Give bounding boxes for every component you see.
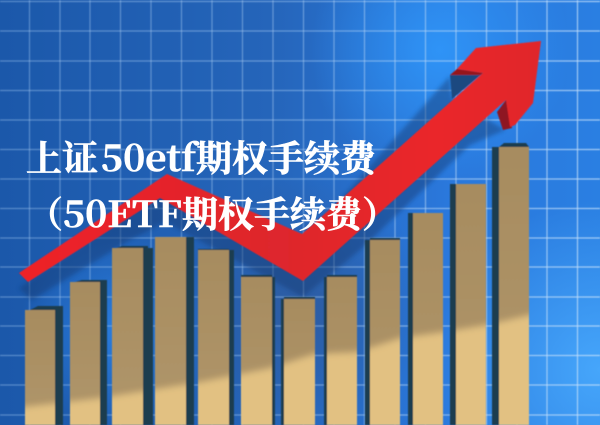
bar 8 [327,277,357,425]
title line 1: 期权手续费 [196,131,378,182]
bar chart [25,143,529,425]
bar 2 [70,282,100,425]
red rising arrow [19,41,541,282]
bar 7 [284,299,315,425]
icon: arrow notch shadow [450,73,483,99]
bar 3 [112,248,143,425]
title line 1: 50etf [101,131,200,182]
bar 11 [456,184,486,425]
arrow body [19,41,541,282]
bar 5 [198,250,229,425]
title [26,131,398,238]
title line 2: （ [27,187,63,238]
title line 2: 50ETF [63,187,182,238]
arrow cast shadow [19,76,505,300]
bar 6 [241,277,272,425]
bar 9 [370,240,400,425]
bar 12 [499,147,529,425]
bar 1 [25,310,55,425]
title line 2: 期权手续费 [182,187,364,238]
title line 1: 上证 [26,131,98,182]
bar shadows [30,143,529,425]
arrow fold [497,100,512,130]
bar 10 [413,213,443,425]
bar 4 [155,237,186,425]
lit lower section of bars [25,300,529,425]
title line 2: ） [362,187,398,238]
arrow notch edge [450,69,483,75]
